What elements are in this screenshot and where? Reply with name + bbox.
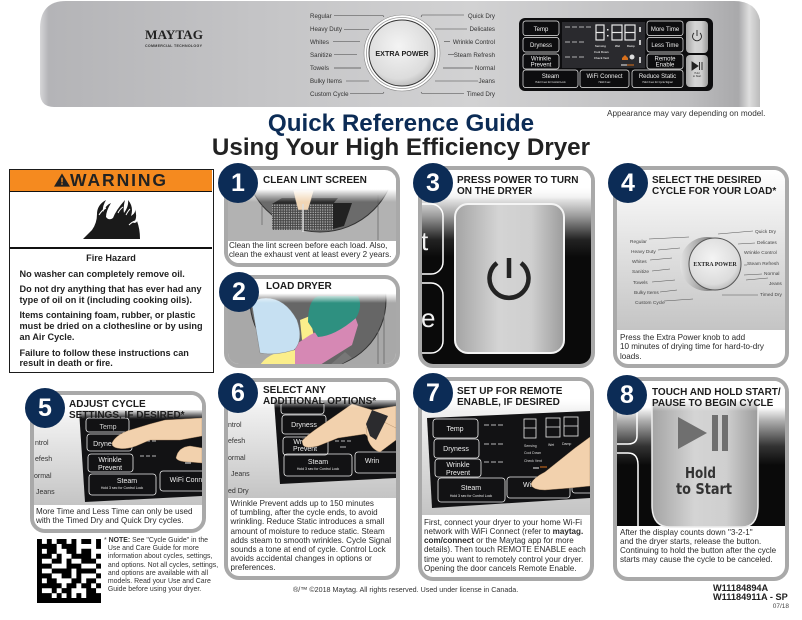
footnote: models. Read your Use and Care	[108, 578, 211, 585]
illustration: settings panel with fingers: WiFi Conn	[170, 477, 202, 484]
cycle labels left	[310, 13, 384, 98]
illustration: wifi connect with finger: Check Vent	[524, 459, 542, 463]
caption: After the display counts down "3-2-1"	[620, 528, 753, 537]
control panel header image	[40, 1, 760, 107]
caption: loads.	[620, 352, 642, 360]
footnote: Guide before using your dryer.	[108, 586, 201, 593]
extra power knob: EXTRA POWER	[375, 49, 429, 58]
warning banner	[10, 170, 212, 192]
illustration: wifi connect with finger: Re	[578, 479, 587, 486]
touch control panel: Hold 3 sec for Control Lock	[535, 81, 566, 84]
display: Damp	[627, 44, 635, 48]
illustration: wifi connect with finger: Dryness	[443, 446, 469, 453]
illustration: options panel with finger: ntrol	[228, 422, 242, 429]
cycle labels left: Heavy Duty	[310, 26, 343, 33]
part numbers: W11184911A - SP	[713, 592, 788, 602]
step 7: remote enable	[413, 373, 594, 581]
illustration: options panel with finger: ormal	[228, 455, 246, 462]
heading: ADJUST CYCLE	[69, 399, 146, 410]
caption: First, connect your dryer to your home Wi-Fi	[424, 518, 582, 527]
step 4: select cycle	[608, 163, 789, 368]
cycle labels right: Normal	[475, 65, 495, 72]
panel body	[40, 1, 760, 107]
number badge 3	[413, 163, 453, 203]
heading: ENABLE, IF DESIRED	[457, 397, 560, 408]
touch control panel: Reduce Static	[639, 74, 676, 80]
step 1: clean lint screen	[218, 163, 400, 267]
illustration: settings panel with fingers: Steam	[117, 478, 137, 485]
illustration: cycle knob: Delicates	[757, 240, 777, 246]
heading: ADDITIONAL OPTIONS*	[263, 396, 376, 407]
touch control panel: More Time	[651, 27, 680, 33]
illustration: cycle knob: Timed Dry	[760, 292, 783, 298]
illustration: wifi connect with finger: Hold 3 sec for Control Lock	[450, 494, 492, 498]
Maytag logo: COMMERCIAL TECHNOLOGY	[145, 44, 203, 48]
caption: Press the Extra Power knob to add	[620, 332, 745, 342]
touch control panel: Temp	[534, 27, 549, 33]
heading: SELECT ANY	[263, 385, 326, 396]
illustration: wifi connect with finger: Wrinkle	[446, 462, 470, 469]
cycle labels right: Steam Refresh	[454, 52, 496, 59]
footnote: information about cycles, settings,	[108, 553, 212, 560]
illustration: options panel with finger: Jeans	[231, 471, 250, 478]
caption	[230, 499, 391, 572]
caption	[620, 528, 776, 564]
heading: CLEAN LINT SCREEN	[263, 175, 367, 186]
number badge 6: 6	[231, 379, 245, 407]
caption	[424, 518, 586, 573]
touch control panel: Hold 3 sec for Cycle Signal	[642, 81, 673, 84]
footnote: and options. Not all cycles, settings,	[108, 562, 218, 569]
display: Wet	[615, 44, 620, 48]
illustration: options panel with finger: Wrin	[365, 458, 379, 465]
caption: clean the exhaust vent at least every 2 years.	[229, 250, 391, 259]
number badge 3: 3	[426, 169, 440, 197]
part numbers: 07/18	[773, 603, 789, 610]
heading: LOAD DRYER	[266, 280, 332, 292]
cycle labels left: Custom Cycle	[310, 91, 349, 98]
caption: Opening the door cancels Remote Enable.	[424, 564, 577, 573]
extra power knob	[364, 15, 440, 91]
warning text: Failure to follow these instructions can	[20, 348, 189, 358]
caption: Clean the lint screen before each load. Also,	[229, 240, 387, 250]
number badge 4	[608, 163, 648, 203]
illustration: settings panel with fingers: efesh	[35, 456, 52, 463]
illustration: wifi connect with finger: Steam	[461, 485, 481, 492]
illustration: cycle knob: Heavy Duty	[631, 249, 656, 255]
illustration: settings panel with fingers: Temp	[99, 424, 117, 431]
illustration: lint screen	[228, 170, 396, 263]
illustration: settings panel with fingers: Prevent	[98, 465, 122, 472]
touch control panel: WiFi Connect	[586, 74, 623, 80]
touch control panel: to Start	[693, 75, 701, 78]
copyright: ®/™ ©2018 Maytag. All rights reserved. Used under license in Canada.	[293, 586, 518, 594]
touch control panel: Less Time	[651, 43, 679, 49]
caption: of tumbling, after the cycle ends, to avoid	[230, 508, 378, 517]
touch control panel: Prevent	[531, 62, 552, 68]
cycle labels right: Wrinkle Control	[453, 39, 495, 46]
illustration: cycle knob: Regular	[630, 239, 647, 245]
illustration: cycle knob: Whites	[632, 259, 647, 265]
heading	[263, 385, 376, 407]
illustration: settings panel with fingers: ormal	[34, 473, 52, 480]
step 5: adjust cycle settings	[25, 388, 206, 533]
touch control panel: Steam	[542, 74, 559, 80]
caption: 10 minutes of drying time for hard-to-dry	[620, 342, 764, 351]
caption	[620, 332, 764, 360]
caption: details). Then touch REMOTE ENABLE each	[424, 545, 586, 554]
heading	[69, 399, 185, 421]
illustration: cycle knob	[617, 170, 785, 330]
caption: starts may cause the cycle to be canceled.	[620, 555, 773, 564]
footnote: and options are available with all	[108, 570, 208, 577]
display: Cool Down	[594, 50, 609, 54]
footnote	[104, 536, 218, 593]
illustration: settings panel with fingers: Wrinkle	[98, 457, 122, 464]
warning text: No washer can completely remove oil.	[20, 268, 185, 278]
number badge 2: 2	[232, 278, 246, 306]
number badge 6	[218, 373, 258, 413]
illustration: options panel with finger: Dryness	[291, 422, 317, 429]
title	[212, 110, 590, 161]
touch buttons	[523, 21, 683, 88]
warning text: Fire Hazard	[86, 252, 136, 262]
caption	[36, 506, 193, 525]
illustration: wifi connect with finger: ct	[557, 482, 563, 489]
number badge 7: 7	[426, 379, 440, 407]
warning text: Items containing foam, rubber, or plastic	[20, 310, 195, 320]
illustration: wifi connect with finger: WiFi	[523, 482, 537, 489]
illustration: settings panel with fingers: Jeans	[36, 489, 55, 496]
cycle labels left: Bulky Items	[310, 78, 342, 85]
illustration: settings panel with fingers: Hold 3 sec for Control Lock	[101, 486, 143, 490]
illustration: hold to start button: Hold	[685, 464, 716, 482]
caption: com/connect or the Maytag app for more	[424, 536, 574, 545]
illustration: settings panel with fingers: ntrol	[35, 440, 49, 447]
heading: PRESS POWER TO TURN	[457, 175, 578, 186]
number badge 7	[413, 373, 453, 413]
illustration: cycle knob: Jeans	[769, 281, 782, 287]
title: Quick Reference Guide	[268, 110, 534, 137]
illustration: cycle knob: Towels	[633, 280, 648, 286]
part numbers	[713, 582, 789, 610]
warning text	[20, 252, 203, 368]
touch control panel: Hold 3 sec	[599, 81, 611, 84]
illustration: hold to start button	[617, 381, 785, 528]
footnote: * NOTE: See "Cycle Guide" in the	[104, 537, 208, 544]
touch control panel: Dryness	[530, 43, 552, 49]
illustration: wifi connect with finger: Wet	[548, 443, 554, 447]
illustration: options panel with finger: Prevent	[293, 446, 317, 453]
illustration: wifi connect with finger: Prevent	[446, 470, 470, 477]
step 2: load dryer	[219, 272, 400, 368]
illustration: cycle knob: EXTRA POWER	[693, 262, 737, 268]
divider	[10, 247, 212, 248]
heading: CYCLE FOR YOUR LOAD*	[652, 186, 776, 197]
cycle labels right: Delicates	[470, 26, 495, 33]
heading: SET UP FOR REMOTE	[457, 386, 562, 397]
step 8: touch and hold start	[607, 375, 789, 581]
number badge 2	[219, 272, 259, 312]
touch control panel: Enable	[656, 62, 675, 68]
cycle labels left: Towels	[310, 65, 329, 72]
heading: SETTINGS, IF DESIRED*	[69, 410, 185, 421]
number badge 5: 5	[38, 394, 52, 422]
illustration: wifi connect with finger: Damp	[562, 442, 571, 446]
cycle labels right: Jeans	[478, 78, 495, 85]
touch control panel: Wrinkle	[531, 56, 552, 62]
illustration: cycle knob: Custom Cycle	[635, 300, 665, 306]
data matrix code	[37, 539, 101, 603]
illustration: cycle knob: Bulky Items	[634, 290, 659, 296]
illustration: cycle knob: Quick Dry	[755, 229, 777, 235]
title: Using Your High Efficiency Dryer	[212, 134, 590, 161]
caption: and the dryer starts, release the button.	[620, 537, 761, 546]
illustration: options panel with finger: Hold 3 sec for Control Lock	[297, 467, 339, 471]
silver power and start buttons	[686, 21, 708, 53]
heading: SELECT THE DESIRED	[652, 175, 761, 186]
caption: More Time and Less Time can only be used	[36, 506, 193, 516]
illustration: cycle knob: Normal	[764, 271, 779, 277]
illustration: options panel with finger: ed Dry	[228, 488, 249, 495]
cycle labels right: Quick Dry	[468, 13, 496, 20]
illustration: cycle knob: Sanitize	[632, 269, 649, 275]
caption: Continuing to hold the button after the cycle	[620, 546, 776, 555]
caption: wrinkling. Reduce Static introduces a small	[230, 517, 384, 526]
heading	[652, 387, 781, 409]
cycle labels right	[421, 13, 496, 98]
touch control panel	[519, 18, 713, 91]
illustration: wifi connect with finger	[422, 381, 590, 515]
heading: PAUSE TO BEGIN CYCLE	[652, 398, 773, 409]
heading: TOUCH AND HOLD START/	[652, 387, 781, 398]
heading: ON THE DRYER	[457, 186, 532, 197]
illustration: clothes in drum	[228, 279, 396, 364]
warning text: an Air Cycle.	[20, 332, 74, 342]
illustration: power button	[422, 170, 591, 364]
warning text: must be dried on a clothesline or by using	[20, 320, 203, 330]
illustration: cycle knob: Steam Refresh	[747, 261, 779, 267]
warning text: Do not dry anything that has ever had any	[20, 284, 202, 294]
display: Check Vent	[594, 56, 609, 60]
cycle labels right: Timed Dry	[467, 91, 496, 98]
footnote: Use and Care Guide for more	[108, 545, 199, 552]
illustration: options panel with finger: efesh	[228, 438, 245, 445]
step 3: press power	[413, 163, 595, 368]
illustration: wifi connect with finger: Cool Down	[524, 451, 541, 455]
cycle labels left: Sanitize	[310, 52, 333, 59]
caption: network with WiFi Connect (refer to maytag.	[424, 527, 583, 536]
step 6: select additional options	[218, 373, 400, 580]
warning panel	[9, 168, 214, 372]
Maytag logo	[145, 28, 203, 48]
cycle labels left: Whites	[310, 39, 329, 46]
illustration: settings panel with fingers: Dryness	[93, 441, 119, 448]
warning text: type of oil on it (including cooking oils).	[20, 294, 192, 304]
warning text: result in death or fire.	[20, 358, 113, 368]
display: Sensing	[595, 44, 606, 48]
display	[562, 22, 645, 68]
caption: time you want to remotely control your dryer.	[424, 555, 583, 564]
icon: flames	[83, 200, 140, 239]
caption: sounds a tone at end of cycle. Control Lock	[230, 545, 386, 554]
number badge 5	[25, 388, 65, 428]
number badge 8: 8	[620, 381, 634, 409]
number badge 8	[607, 375, 647, 415]
touch control panel: Hold	[694, 72, 700, 75]
caption: adds steam to smooth wrinkles. Cycle Signal	[230, 536, 391, 545]
caption: Wrinkle Prevent adds up to 150 minutes	[230, 499, 374, 508]
number badge 1: 1	[231, 169, 245, 197]
note: appearance: Appearance may vary depending on model.	[607, 109, 765, 118]
warning banner: WARNING	[70, 170, 168, 190]
illustration: wifi connect with finger: Temp	[446, 426, 464, 433]
heading	[652, 175, 776, 197]
caption: preferences.	[230, 563, 276, 572]
illustration: settings panel with fingers	[34, 395, 202, 529]
caption	[229, 240, 391, 259]
heading	[457, 175, 578, 197]
illustration: wifi connect with finger: Sensing	[524, 444, 537, 448]
number badge 4: 4	[621, 169, 635, 197]
touch control panel: Remote	[654, 56, 676, 62]
Maytag logo: MAYTAG	[145, 28, 203, 42]
number badge 1	[218, 163, 258, 203]
illustration: options panel with finger: Wrinkle	[293, 439, 317, 446]
illustration: hold to start button: to Start	[676, 480, 732, 498]
caption: avoids accidental changes in options or	[230, 554, 372, 563]
heading	[457, 386, 562, 408]
caption: with the Timed Dry and Quick Dry cycles.	[36, 516, 184, 525]
illustration: options panel with finger	[228, 382, 396, 498]
icon: power	[490, 258, 529, 298]
caption: amount of moisture to reduce static. Steam	[230, 527, 385, 536]
part numbers: W11184894A	[713, 582, 768, 592]
cycle labels left: Regular	[310, 13, 332, 20]
illustration: options panel with finger: Steam	[308, 459, 328, 466]
illustration: cycle knob: Wrinkle Control	[744, 250, 777, 256]
